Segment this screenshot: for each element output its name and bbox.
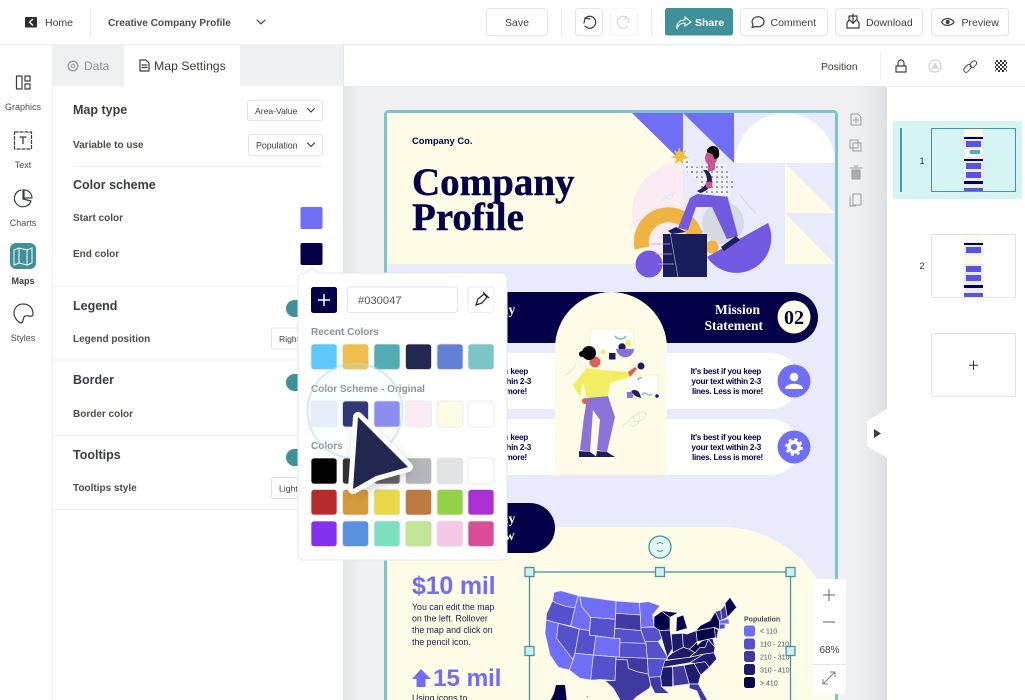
legend position row bbox=[73, 328, 322, 349]
card text: bottom left: lines. Less is more! bbox=[456, 453, 527, 462]
overview banner pill bbox=[390, 503, 555, 553]
add page thumbnail bbox=[932, 334, 1016, 396]
canvas background bbox=[343, 87, 887, 700]
card text: bottom right: lines. Less is more! bbox=[692, 453, 763, 462]
card text: top right: It's best if you keep bbox=[691, 367, 761, 376]
main title: Company bbox=[412, 161, 575, 204]
page frame bbox=[386, 112, 836, 700]
animated cursor bbox=[308, 364, 412, 492]
comment button bbox=[740, 8, 828, 36]
click ripple bbox=[308, 364, 402, 458]
icon: lock bbox=[896, 60, 906, 72]
card row 1 bbox=[400, 353, 799, 409]
cream map section bbox=[387, 527, 835, 700]
stat description: on the left. Rollover bbox=[412, 614, 488, 624]
download button: Download bbox=[866, 17, 913, 29]
variable row: Variable to use bbox=[73, 140, 144, 151]
stat: 10 mil: $10 mil bbox=[412, 572, 495, 600]
legend row: Legend bbox=[73, 299, 117, 313]
preview button: Preview bbox=[962, 17, 999, 29]
tool: maps (active): Maps bbox=[11, 276, 35, 286]
context toolbar bbox=[343, 46, 1025, 87]
panel collapse tab bbox=[867, 409, 887, 458]
number badge 02: 02 bbox=[784, 307, 804, 329]
header cream panel bbox=[387, 113, 683, 264]
tool: charts bbox=[10, 190, 37, 228]
page action icons bbox=[850, 114, 862, 206]
save button: Save bbox=[505, 17, 529, 29]
cursor arrow bbox=[353, 417, 408, 489]
card text: top right: lines. Less is more! bbox=[692, 387, 763, 396]
map legend: 110 - 210 bbox=[760, 642, 789, 648]
home button bbox=[25, 17, 73, 29]
map legend: 310 - 410 bbox=[760, 668, 790, 674]
stat: 15 mil: 15 mil bbox=[433, 665, 501, 692]
map legend bbox=[744, 616, 790, 688]
end color row: End color bbox=[73, 249, 119, 260]
stat description: the map and click on bbox=[412, 625, 493, 635]
comment button: Comment bbox=[770, 17, 816, 29]
preview button bbox=[932, 8, 1008, 36]
tooltips style row: Light bbox=[279, 484, 298, 494]
tool: styles bbox=[11, 304, 36, 343]
border row: Border bbox=[73, 373, 114, 387]
icon: gear badge bbox=[778, 430, 810, 464]
home button: Home bbox=[45, 17, 73, 29]
undo button bbox=[576, 8, 602, 36]
arch panel bbox=[555, 292, 667, 475]
tab: map settings: Map Settings bbox=[154, 59, 226, 73]
card text: top left: lines. Less is more! bbox=[456, 387, 527, 396]
tooltips row bbox=[73, 448, 320, 466]
card text: bottom right: your text within 2-3 bbox=[691, 443, 762, 452]
start color row: Start color bbox=[73, 213, 123, 224]
recent colors label: Recent Colors bbox=[311, 327, 379, 338]
redo button bbox=[610, 8, 638, 36]
tooltips style row: Tooltips style bbox=[73, 483, 137, 494]
color scheme heading: Color scheme bbox=[73, 178, 156, 192]
tooltips row: Tooltips bbox=[73, 448, 121, 462]
start color row bbox=[73, 207, 322, 229]
tool: text bbox=[14, 132, 32, 170]
stat description: You can edit the map bbox=[412, 602, 494, 612]
card text: top right: your text within 2-3 bbox=[691, 377, 762, 386]
eyedropper button bbox=[468, 287, 494, 312]
selected thumbnail: 1 bbox=[919, 156, 925, 166]
map legend: Population bbox=[744, 616, 780, 624]
end color row bbox=[73, 243, 322, 265]
US choropleth map bbox=[545, 591, 737, 700]
legend row bbox=[73, 299, 320, 317]
tool: charts: Charts bbox=[10, 218, 37, 228]
thumbnail 2: 2 bbox=[919, 261, 925, 271]
border color row: Border color bbox=[73, 409, 133, 420]
zoom controls bbox=[813, 579, 846, 694]
top toolbar bbox=[0, 0, 1025, 46]
banner heading: left: Company bbox=[459, 302, 516, 317]
illustration: woman with charts bbox=[565, 329, 659, 457]
map legend: < 110 bbox=[760, 628, 777, 636]
hex input bbox=[348, 287, 458, 312]
tool: graphics: Graphics bbox=[5, 102, 42, 112]
banner heading: left: Vision bbox=[459, 318, 496, 333]
banner heading: mission statement: Statement bbox=[705, 318, 764, 333]
mission banner pill bbox=[390, 292, 818, 343]
share button: Share bbox=[695, 17, 724, 29]
recent color swatches bbox=[311, 344, 494, 370]
selected thumbnail bbox=[893, 121, 1022, 199]
map type row: Area-Value bbox=[255, 106, 298, 116]
settings panel bbox=[53, 45, 344, 700]
colors label: Colors bbox=[311, 441, 343, 452]
banner heading: overview: Company bbox=[459, 511, 516, 526]
rotate handle bbox=[649, 536, 671, 558]
download button bbox=[836, 8, 922, 36]
chevron bbox=[257, 20, 265, 24]
right thumbnail panel bbox=[887, 87, 1025, 700]
zoom controls: 68% bbox=[819, 645, 840, 656]
variable row: Population bbox=[256, 140, 298, 150]
map legend: 210 - 310 bbox=[760, 654, 790, 662]
share button bbox=[665, 8, 733, 36]
company label: Company Co. bbox=[412, 135, 472, 146]
tab: data bbox=[53, 45, 124, 86]
color swatches bbox=[311, 458, 494, 546]
tool: text: Text bbox=[15, 160, 32, 170]
legend position row: Right bbox=[279, 334, 300, 344]
tool: maps (active) bbox=[10, 243, 36, 286]
map type row: Map type bbox=[73, 103, 127, 117]
context toolbar: Position bbox=[821, 62, 858, 73]
selection frame and handles bbox=[525, 568, 795, 700]
color scheme label: Color Scheme - Original bbox=[311, 384, 425, 395]
illustration: man climbing bbox=[636, 146, 771, 278]
tool: graphics bbox=[5, 76, 42, 112]
stat description: the pencil icon. bbox=[412, 637, 471, 647]
geometric decorations bbox=[632, 113, 835, 264]
map type row bbox=[73, 100, 322, 120]
card text: bottom right: It's best if you keep bbox=[691, 433, 761, 442]
number badge 02 bbox=[778, 300, 810, 334]
save button bbox=[486, 8, 548, 36]
card text: bottom left: It's best if you keep bbox=[458, 433, 528, 442]
color picker popover bbox=[298, 268, 507, 560]
icon: fill disabled bbox=[929, 60, 941, 72]
tooltips style row bbox=[73, 478, 322, 498]
tab: data: Data bbox=[84, 59, 110, 73]
add color button bbox=[311, 287, 337, 313]
tool: styles: Styles bbox=[11, 333, 36, 343]
card text: top left: It's best if you keep bbox=[458, 367, 528, 376]
icon: up arrow bbox=[412, 669, 431, 687]
card text: bottom left: your text within 2-3 bbox=[461, 443, 532, 452]
variable row bbox=[73, 134, 322, 156]
border row bbox=[73, 373, 320, 391]
banner heading: mission statement: Mission bbox=[715, 302, 760, 317]
map legend: > 410 bbox=[760, 680, 778, 688]
icon: link bbox=[964, 61, 977, 72]
hex input: #030047 bbox=[358, 295, 402, 307]
card row 2 bbox=[400, 419, 799, 475]
left sidebar bbox=[0, 45, 53, 700]
thumbnail 2 bbox=[919, 234, 1016, 298]
infographic page bbox=[386, 112, 836, 700]
cursor shadow bbox=[354, 425, 412, 492]
main title: Profile bbox=[412, 196, 524, 239]
card text: top left: your text within 2-3 bbox=[461, 377, 532, 386]
scheme swatches bbox=[311, 401, 494, 427]
banner heading: overview: Overview bbox=[459, 528, 515, 543]
document name: Creative Company Profile bbox=[108, 18, 231, 29]
icon: user badge bbox=[778, 364, 810, 398]
legend position row: Legend position bbox=[73, 334, 150, 345]
icon: transparency bbox=[995, 60, 1007, 72]
